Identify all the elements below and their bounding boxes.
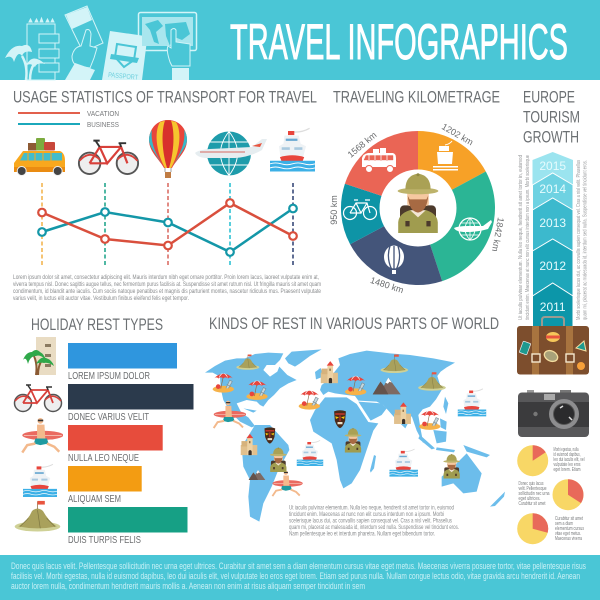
icon: white balloon bbox=[384, 246, 404, 274]
chart description text bbox=[13, 275, 322, 302]
icon: explorer bbox=[398, 173, 438, 233]
bar 5: DUIS TURPIS FELIS bbox=[68, 535, 141, 546]
pie text 1: Morbi egestas, nulla bbox=[554, 447, 579, 453]
pie text 1: vulputate leo eros bbox=[554, 462, 581, 468]
bar 1: LOREM IPSUM DOLOR bbox=[68, 371, 150, 382]
heading: europe tourism growth: EUROPE bbox=[523, 88, 575, 106]
bar 2: DONEC VARIUS VELIT bbox=[68, 412, 149, 423]
icon: tent hill bbox=[15, 501, 60, 532]
map description text: scelerisque lacus dui, ac convallis sapien consequat vel. Cras a nisl velit. Phasellus bbox=[289, 518, 452, 524]
map description text: Ut iaculis pulvinar elementum. Nulla leo neque, hendrerit sit amet tortor in, euismod bbox=[289, 506, 454, 512]
chart description text: condimentum, id blandit ante iaculis. Cum sociis natoque penatibus et magnis dis parturient montes, nascetur ridiculus mus. Praesent vulputate bbox=[13, 289, 322, 295]
pie text 3: Maecenas viverra bbox=[555, 536, 582, 542]
map icons: surfers bbox=[214, 401, 303, 496]
pie text 3 bbox=[555, 516, 584, 542]
legend: BUSINESS bbox=[87, 120, 119, 129]
icon: bus bbox=[14, 138, 65, 176]
icon: white bus bbox=[362, 148, 396, 172]
heading: europe tourism growth bbox=[523, 88, 580, 146]
pie text 2: velit. Pellentesque bbox=[518, 486, 547, 492]
icon: white bicycle bbox=[344, 200, 376, 220]
icon: ship bbox=[23, 464, 57, 497]
vertical text right of arrow: quam mi, placerat ac malesuada id, interdum sed nulla. Suspendisse vel tincidunt eros. bbox=[582, 160, 588, 320]
bar 3 bbox=[68, 425, 163, 464]
icon: white ship bbox=[433, 141, 458, 170]
icon: suitcase bbox=[517, 317, 589, 374]
pie text 1 bbox=[554, 447, 584, 473]
km labels: 1202 km bbox=[440, 121, 475, 147]
series: business bbox=[38, 205, 297, 256]
pie chart 2 bbox=[552, 479, 584, 510]
map icons: mountains bbox=[249, 378, 401, 480]
icon: surfer bbox=[22, 418, 63, 453]
icon: bicycle bbox=[14, 385, 62, 412]
series: vacation bbox=[38, 199, 297, 249]
km labels: 1568 km bbox=[346, 130, 379, 160]
bar 1 bbox=[68, 343, 177, 382]
pie text 2: Donec quis lacus bbox=[518, 481, 544, 487]
icon: balloon bbox=[149, 120, 187, 178]
map icons: castles bbox=[241, 361, 411, 455]
vertical text left of arrow bbox=[518, 155, 531, 320]
icon: globe and plane bbox=[195, 132, 267, 176]
icon: bicycle bbox=[79, 141, 138, 174]
pie text 2 bbox=[518, 481, 550, 507]
vertical text left of arrow: tincidunt enim. Maecenas at nunc non elit cursus interdum non a ipsum. Morbi scelerisque bbox=[525, 155, 531, 320]
icon: hand holding tickets bbox=[65, 6, 103, 80]
arrow year labels bbox=[539, 159, 566, 314]
pie chart 1 bbox=[517, 445, 548, 476]
vertical text right of arrow: Morbi scelerisque lacus dui, ac convallis sapien consequat vel. Cras a nisl velit. Phasellus bbox=[576, 160, 582, 320]
icon: cruise ship bbox=[270, 128, 315, 172]
icon: hotel and palm bbox=[23, 337, 56, 375]
arrow year labels: 2015 bbox=[539, 159, 566, 173]
bar 2 bbox=[68, 384, 194, 423]
arrow year labels: 2013 bbox=[539, 216, 566, 230]
map description text: tincidunt enim. Maecenas at nunc non elit cursus interdum non a ipsum. Morbi bbox=[289, 512, 444, 518]
km labels: 950 km bbox=[329, 195, 339, 225]
map continents bbox=[205, 349, 505, 522]
icon: white globe and plane bbox=[454, 218, 492, 240]
icon: hotel with palms bbox=[5, 18, 59, 80]
chart description text: viverra tempus nisl. Donec sagittis augue tellus, nec fermentum purus facilisis at. Suspendisse sit amet rutrum nisl. Ut fringilla mauris sit amet quam bbox=[13, 282, 321, 288]
heading: holiday rest types: HOLIDAY REST TYPES bbox=[31, 315, 163, 334]
growth arrow bbox=[532, 152, 573, 328]
legend bbox=[18, 109, 119, 129]
footer text bbox=[11, 561, 586, 591]
pie text 1: eget lorem. Etiam bbox=[554, 467, 580, 473]
vertical text right of arrow bbox=[576, 160, 588, 320]
map icons: ships bbox=[297, 389, 486, 477]
map description text: Nam pellentesque leo et interdum pharetra. Nullam eget bibendum tortor. bbox=[289, 532, 435, 538]
header band bbox=[0, 0, 600, 82]
bar 4: ALIQUAM SEM bbox=[68, 494, 121, 505]
chart description text: Lorem ipsum dolor sit amet, consectetur adipiscing elit. Mauris interdum nibh eget ornare porttitor. Proin lorem lacus, laoreet vulputate enim at, bbox=[13, 275, 319, 281]
bar 5 bbox=[68, 507, 188, 546]
world map bbox=[205, 349, 505, 522]
pie text 3: Curabitur sit amet bbox=[555, 516, 583, 522]
pie text 3: vitae eget metus. bbox=[555, 531, 581, 537]
map icons: hills bbox=[236, 354, 446, 391]
vertical text left of arrow: Ut iaculis pulvinar elementum. Nulla leo neque, hendrerit sit amet tortor in, euismod bbox=[518, 155, 524, 320]
heading: traveling kilometrage: TRAVELING KILOMETRAGE bbox=[333, 88, 500, 106]
pie text 2: eget ultrices. bbox=[518, 496, 540, 502]
heading: usage statistics: USAGE STATISTICS OF TRANSPORT FOR TRAVEL bbox=[13, 88, 317, 106]
heading: kinds of rest: KINDS OF REST IN VARIOUS PARTS OF WORLD bbox=[209, 314, 499, 333]
map description text: quam mi, placerat ac malesuada id, interdum sed nulla. Suspendisse vel tincidunt eros. bbox=[289, 525, 459, 531]
icon: passport bbox=[102, 31, 147, 82]
km labels: 1842 km bbox=[490, 217, 506, 252]
bar 4 bbox=[68, 466, 142, 505]
pie text 3: elementum cursus bbox=[555, 526, 584, 532]
km labels bbox=[329, 121, 506, 295]
pie text 1: id euismod dapibus, bbox=[554, 452, 580, 458]
footer text: auctor lorem nulla, condimentum hendrerit mauris mollis a. Aenean non enim at risus aliquam semper tincidunt in sem bbox=[11, 581, 365, 591]
icon: camera bbox=[518, 390, 589, 437]
map description text bbox=[289, 506, 459, 538]
chart description text: varius velit, in luctus elit auctor vitae. Vestibulum finibus eleifend felis eget tempor. bbox=[13, 296, 189, 302]
arrow year labels: 2011 bbox=[540, 300, 566, 314]
icon: passport: PASSPORT bbox=[108, 72, 139, 82]
legend: VACATION bbox=[87, 109, 119, 118]
footer band bbox=[0, 555, 600, 600]
pie text 2: sollicitudin nec urna bbox=[518, 491, 550, 497]
heading: europe tourism growth: GROWTH bbox=[523, 128, 579, 146]
icon: tablet with hand bbox=[138, 12, 196, 80]
donut chart bbox=[329, 121, 506, 295]
line chart bbox=[38, 183, 297, 265]
map icons: masks bbox=[264, 410, 346, 444]
pie chart 3 bbox=[517, 513, 548, 544]
map icons: beach umbrellas bbox=[213, 373, 440, 430]
arrow year labels: 2014 bbox=[539, 182, 566, 196]
km labels: 1480 km bbox=[369, 275, 405, 295]
pie text 1: leo dui iaculis elit, vel bbox=[554, 457, 584, 463]
pie text 3: sem a diam bbox=[555, 521, 573, 527]
pie text 2: Curabitur sit amet bbox=[518, 501, 546, 507]
arrow year labels: 2012 bbox=[539, 259, 566, 273]
map icons: explorers bbox=[270, 428, 460, 479]
bar 3: NULLA LEO NEQUE bbox=[68, 453, 139, 464]
heading: europe tourism growth: TOURISM bbox=[523, 108, 580, 126]
